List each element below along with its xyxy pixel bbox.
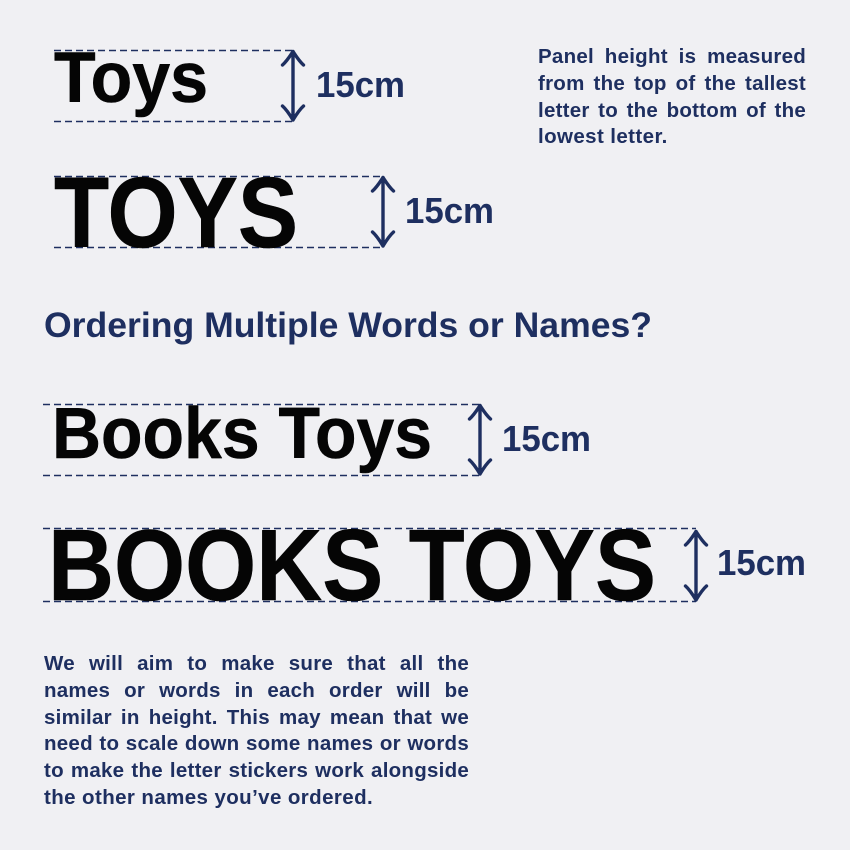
word: TOYS: TOYS xyxy=(54,157,298,269)
example: BOOKS TOYS xyxy=(43,510,806,622)
text block: panel height explanation: lowest letter. xyxy=(538,125,668,148)
words: Books Toys: Books Toys xyxy=(52,394,432,474)
example: Toys xyxy=(54,39,405,122)
example: TOYS xyxy=(54,157,494,269)
word: Toys: Toys xyxy=(54,39,208,118)
text block: scaling note: the other names you’ve ordered. xyxy=(44,786,373,809)
text block: panel height explanation: from the top of the tallest xyxy=(538,72,806,95)
text block: scaling note xyxy=(44,652,469,809)
text block: scaling note: to make the letter stickers work alongside xyxy=(44,759,469,782)
measure label: Toys: 15cm xyxy=(316,64,405,105)
words: BOOKS TOYS: BOOKS TOYS xyxy=(48,510,656,622)
text block: scaling note: similar in height. This may mean that we xyxy=(44,706,469,729)
text block: scaling note: We will aim to make sure that all the xyxy=(44,652,469,675)
example: Books Toys xyxy=(43,394,591,476)
text block: panel height explanation xyxy=(538,45,806,148)
text block: scaling note: names or words in each order will be xyxy=(44,679,469,702)
text block: panel height explanation: letter to the bottom of the xyxy=(538,99,806,122)
arrow: BOOKS TOYS height xyxy=(686,532,706,600)
measure label: Books Toys: 15cm xyxy=(502,418,591,459)
arrow: Toys height xyxy=(282,52,304,120)
text block: panel height explanation: Panel height is measured xyxy=(538,45,806,68)
heading: Ordering Multiple Words or Names? xyxy=(44,306,652,345)
arrow: TOYS height xyxy=(372,178,394,246)
text block: scaling note: need to scale down some names or words xyxy=(44,732,469,755)
arrow: Books Toys height xyxy=(470,406,490,474)
measure label: BOOKS TOYS: 15cm xyxy=(717,542,806,583)
measure label: TOYS: 15cm xyxy=(405,190,494,231)
